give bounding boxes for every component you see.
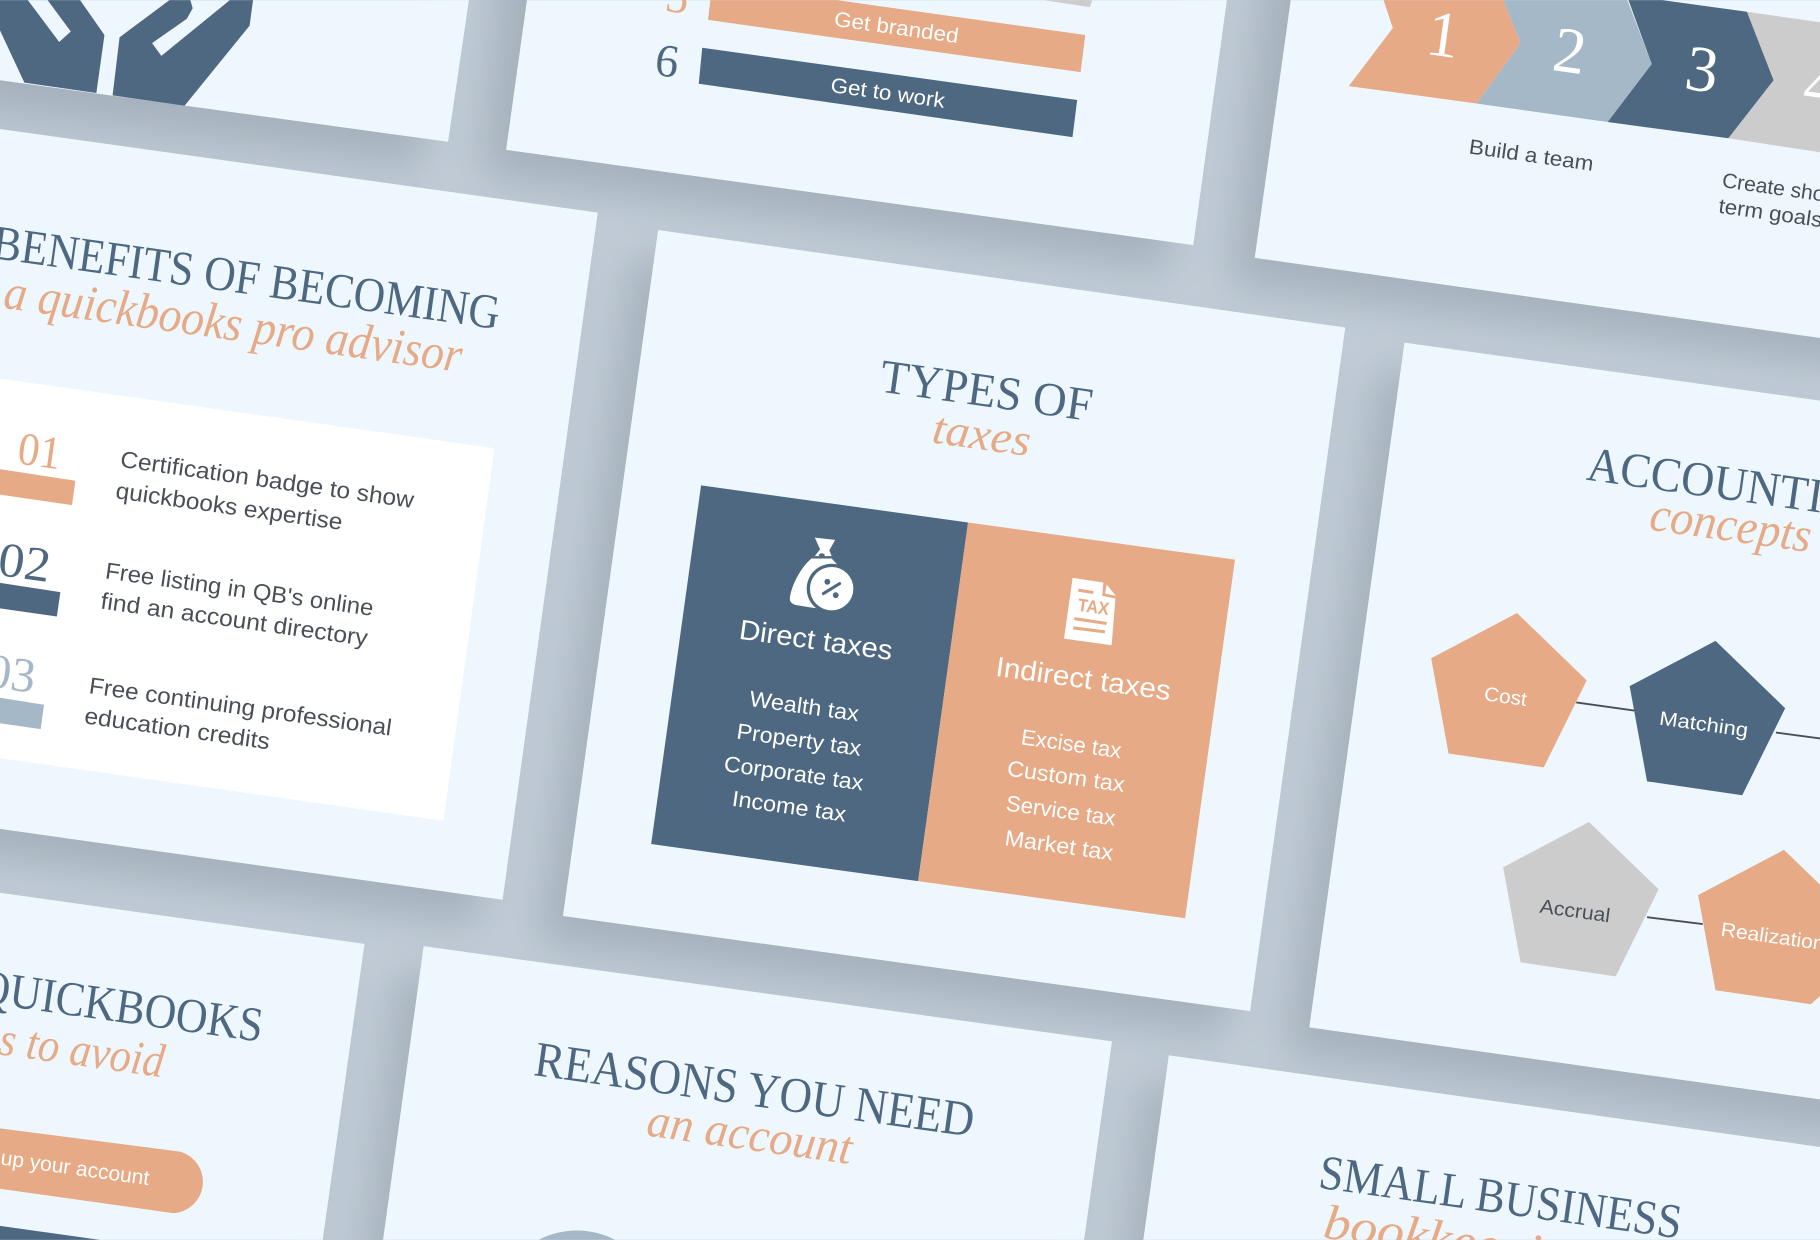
chevron 2: [1476, 0, 1652, 122]
item 01: 01: [15, 424, 64, 480]
list: indirect taxes: Service tax: [1004, 791, 1117, 831]
label: direct taxes: Direct taxes: [737, 614, 895, 666]
chevron 4: [1728, 12, 1820, 152]
icon: tax document: TAX: [1077, 595, 1110, 619]
grey bar fragment: [1043, 0, 1092, 7]
chevron numbers: 2: [1549, 13, 1591, 89]
panel: indirect taxes: [918, 522, 1235, 918]
pentagon: realization: Realization: [1719, 919, 1820, 955]
label: indirect taxes: Indirect taxes: [994, 651, 1173, 706]
bar: get to work: [699, 48, 1077, 137]
icon: open hands: [0, 0, 253, 106]
list: direct taxes: Income tax: [731, 786, 848, 827]
panel: accounting concepts slide: [1309, 343, 1820, 1099]
panel: quickbooks mistakes slide: [0, 893, 364, 1240]
item 01: [0, 424, 416, 535]
list: indirect taxes: Custom tax: [1006, 756, 1126, 797]
panel: top-left slide: [0, 0, 469, 142]
pentagon: cost: Cost: [1483, 683, 1529, 711]
heading: reasons: an account: [644, 1095, 857, 1175]
panel: numbered chevrons slide: [1255, 0, 1820, 338]
pentagon: accrual: [1503, 822, 1659, 976]
connector lines: [1576, 702, 1820, 924]
heading: types of taxes: TYPES OF: [877, 351, 1096, 432]
pill: set up your account: up your account: [0, 1147, 151, 1190]
panel: reasons slide: [383, 946, 1112, 1240]
item 03: education credits: [83, 703, 272, 754]
list: indirect taxes: [1003, 724, 1126, 865]
list: direct taxes: Corporate tax: [722, 751, 865, 795]
label: create short term goals: [1717, 169, 1820, 232]
panel: benefits slide: [0, 129, 598, 900]
panel: types of taxes slide: [563, 230, 1345, 1011]
list: indirect taxes: Market tax: [1003, 825, 1115, 865]
circle fragment: [539, 1231, 615, 1240]
panel: small business slide: [1143, 1055, 1820, 1240]
pentagon: accrual: Accrual: [1538, 896, 1612, 927]
step 6 number: 6: [652, 35, 682, 89]
list: direct taxes: [722, 686, 865, 827]
chevron 3: [1608, 0, 1774, 138]
list: indirect taxes: Excise tax: [1020, 724, 1123, 763]
heading: types of taxes: taxes: [930, 403, 1034, 466]
list: direct taxes: Wealth tax: [748, 686, 861, 726]
label: build a team: Build a team: [1468, 136, 1595, 176]
heading: benefits: a quickbooks pro advisor: [1, 264, 466, 383]
heading: quickbooks mistakes: [0, 959, 267, 1088]
pentagon: matching: [1630, 641, 1785, 795]
next pill fragment: [0, 1226, 100, 1240]
list: direct taxes: Property tax: [735, 719, 863, 761]
item 03: [0, 644, 393, 754]
label: create short term goals: term goals: [1717, 195, 1820, 232]
bar: get branded: Get branded: [833, 8, 960, 48]
item 01: quickbooks expertise: [114, 477, 344, 535]
pill: set up your account: [0, 1128, 203, 1213]
pentagon: realization: [1698, 850, 1820, 1004]
pentagon: cost: [1431, 613, 1587, 767]
icon: money bag with percent: [790, 538, 857, 614]
chevron numbers: 3: [1681, 32, 1723, 108]
chevron numbers: [1422, 0, 1820, 124]
bar: get to work: Get to work: [829, 74, 947, 113]
panel: steps bars slide: [506, 0, 1227, 245]
icon: tax document: [1064, 578, 1116, 645]
item 02: [0, 532, 375, 651]
pentagon: matching: Matching: [1658, 708, 1750, 742]
heading: benefits: BENEFITS OF BECOMING: [0, 215, 504, 340]
heading: quickbooks mistakes: s to avoid: [0, 1014, 168, 1088]
item 02: find an account directory: [99, 588, 370, 651]
item 02: Free listing in QB's online: [104, 557, 375, 621]
item 01: Certification badge to show: [119, 446, 416, 513]
bar: get branded: [708, 0, 1085, 72]
white list card: [0, 379, 494, 821]
panel: direct taxes: [651, 485, 968, 881]
item 03: Free continuing professional: [88, 672, 393, 741]
heading: accounting concepts: concepts: [1647, 487, 1815, 563]
heading: reasons: REASONS YOU NEED: [531, 1031, 978, 1148]
chevron 1: [1349, 0, 1521, 103]
heading: types of taxes: [877, 351, 1096, 466]
